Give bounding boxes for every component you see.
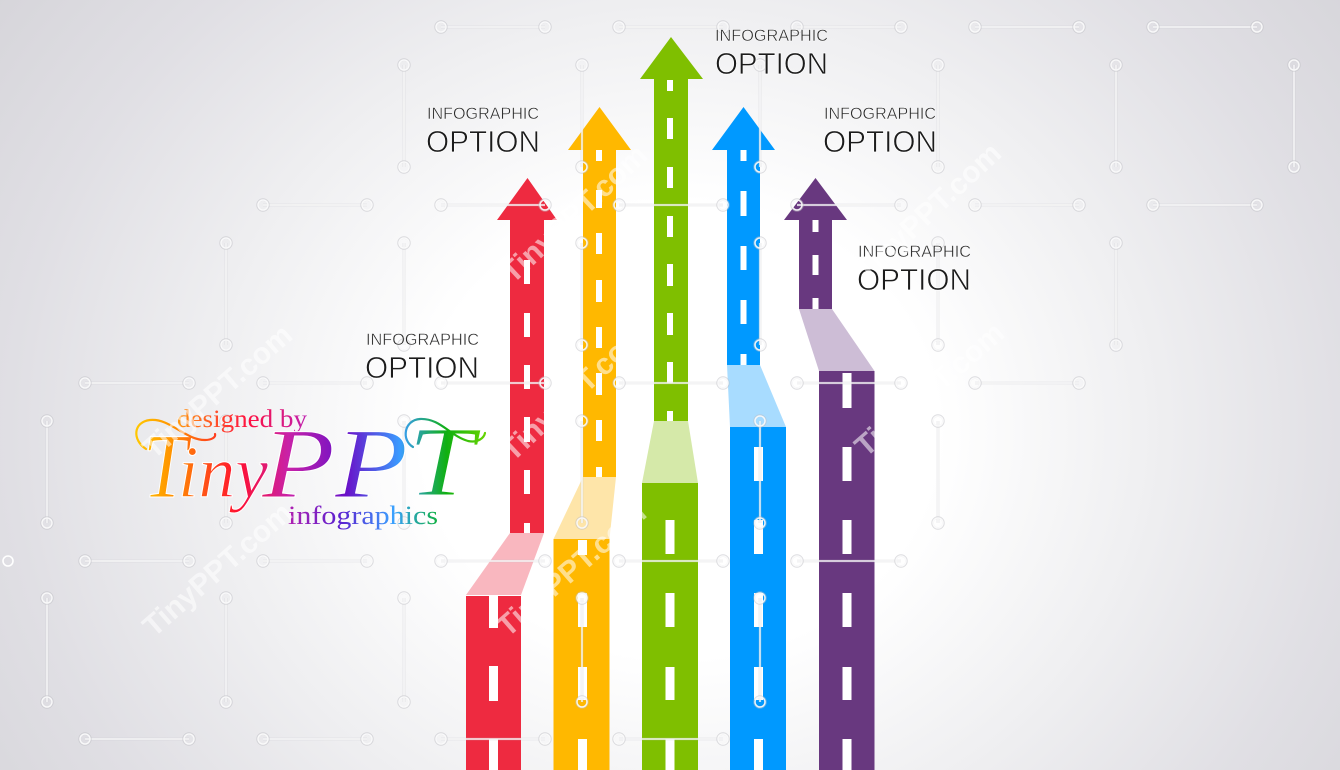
road: yellow — [554, 107, 631, 770]
label: blue road option — [823, 105, 937, 159]
label: blue road option: INFOGRAPHIC — [824, 105, 936, 123]
watermarks: TinyPPT.com — [849, 316, 1011, 463]
label: green road option: OPTION — [715, 46, 828, 81]
watermarks: TinyPPT.com — [491, 496, 653, 643]
label: red road option — [365, 331, 479, 385]
logo: designed by TinyPPT infographics: T — [408, 406, 482, 517]
label: purple road option — [857, 243, 971, 297]
road: red — [466, 178, 557, 770]
label: red road option: INFOGRAPHIC — [366, 331, 479, 349]
logo: designed by TinyPPT infographics: PP — [261, 408, 408, 519]
label: yellow road option — [426, 105, 540, 159]
logo: designed by TinyPPT infographics: T — [143, 415, 192, 517]
watermarks: TinyPPT.com — [495, 139, 654, 290]
road: green — [640, 37, 703, 770]
watermarks: TinyPPT.com — [849, 137, 1008, 288]
label: yellow road option: INFOGRAPHIC — [427, 105, 539, 123]
label: blue road option: OPTION — [823, 124, 937, 159]
road: purple — [784, 178, 874, 770]
logo: designed by TinyPPT infographics: iny — [178, 432, 268, 514]
watermarks — [137, 137, 1011, 643]
label: red road option: OPTION — [365, 350, 479, 385]
label: green road option — [715, 27, 828, 81]
label: purple road option: INFOGRAPHIC — [858, 243, 971, 261]
watermarks: TinyPPT.com — [137, 318, 299, 465]
logo: designed by TinyPPT infographics: designed by — [177, 406, 308, 433]
label: green road option: INFOGRAPHIC — [715, 27, 828, 45]
watermarks: TinyPPT.com — [137, 496, 299, 643]
label: purple road option: OPTION — [857, 262, 971, 297]
watermarks: TinyPPT.com — [495, 317, 654, 468]
logo: designed by TinyPPT infographics: infographics — [288, 501, 438, 530]
label: yellow road option: OPTION — [426, 124, 540, 159]
logo: designed by TinyPPT infographics — [136, 406, 485, 530]
road: blue — [712, 107, 786, 770]
